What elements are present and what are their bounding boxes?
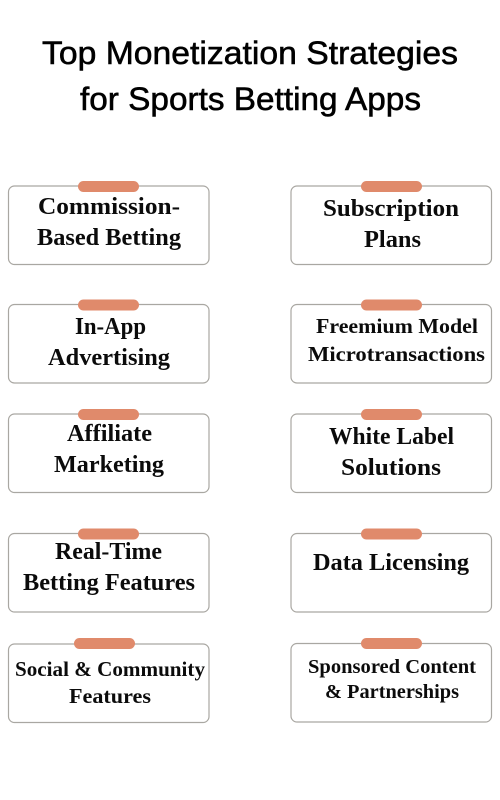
card: White Label Solutions: White Label bbox=[329, 423, 454, 450]
card: Social & Community Features bbox=[8, 638, 209, 722]
title bbox=[42, 35, 458, 117]
card: Real-Time Betting Features bbox=[8, 528, 209, 612]
card: Freemium Model Microtransactions: Freemium Model bbox=[316, 314, 478, 338]
card: Freemium Model Microtransactions: Microtransactions bbox=[308, 342, 485, 366]
card: Subscription Plans: Subscription bbox=[323, 195, 459, 222]
card: White Label Solutions bbox=[291, 409, 492, 492]
card: Commission-Based Betting: Commission- bbox=[38, 193, 180, 220]
card: Affiliate Marketing: Marketing bbox=[54, 451, 165, 478]
card: Social & Community Features: Social & Community bbox=[15, 657, 206, 681]
title: for Sports Betting Apps bbox=[80, 81, 421, 117]
card: Subscription Plans bbox=[291, 181, 492, 264]
card: Real-Time Betting Features: Betting Features bbox=[23, 569, 195, 596]
title: Top Monetization Strategies bbox=[42, 35, 458, 71]
card: In-App Advertising: In-App bbox=[75, 313, 146, 340]
card: Real-Time Betting Features: Real-Time bbox=[55, 538, 162, 565]
card: Data Licensing bbox=[291, 528, 492, 612]
card: Sponsored Content & Partnerships: & Partnerships bbox=[325, 682, 459, 703]
card: In-App Advertising: Advertising bbox=[48, 344, 171, 371]
card: Freemium Model Microtransactions bbox=[291, 300, 492, 383]
card: Affiliate Marketing: Affiliate bbox=[67, 420, 152, 447]
card: Commission-Based Betting bbox=[8, 181, 209, 264]
card: Social & Community Features: Features bbox=[69, 684, 151, 708]
card: In-App Advertising bbox=[8, 300, 209, 383]
card: Sponsored Content & Partnerships: Sponsored Content bbox=[308, 657, 477, 678]
card: Commission-Based Betting: Based Betting bbox=[37, 224, 182, 251]
card: Affiliate Marketing bbox=[8, 409, 209, 492]
card: Data Licensing: Data Licensing bbox=[313, 549, 470, 576]
card: Subscription Plans: Plans bbox=[364, 226, 421, 253]
card: Sponsored Content & Partnerships bbox=[291, 638, 492, 722]
card: White Label Solutions: Solutions bbox=[341, 454, 441, 481]
